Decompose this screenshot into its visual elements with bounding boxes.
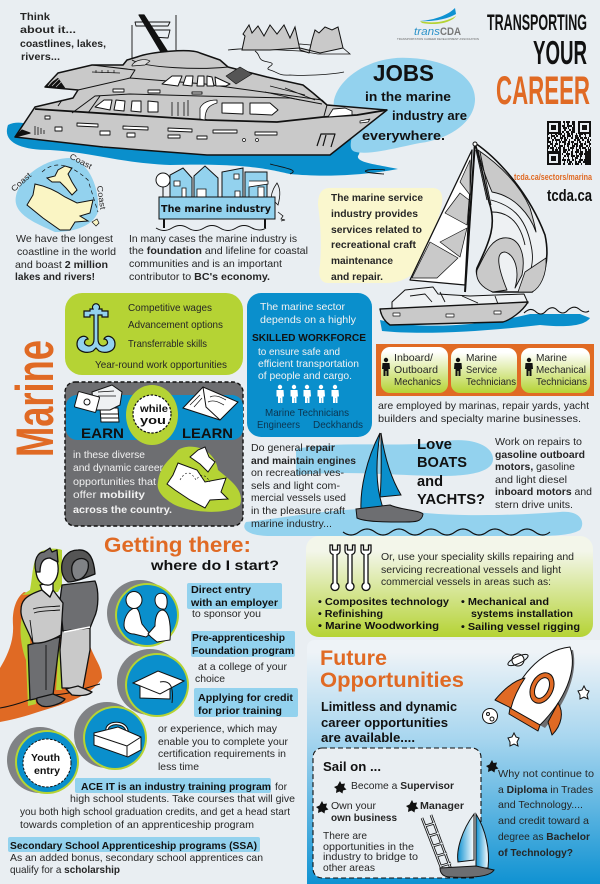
panel: speciality skills: servicing recreational vessels and light: [381, 565, 561, 576]
blue band: [66, 395, 243, 440]
woman: [60, 626, 90, 688]
text: marine industry foundation: contributor to BC's economy.: [129, 272, 270, 283]
panel: speciality skills: Or, use your speciality skills repairing and: [381, 552, 574, 563]
text: repairs to motors: gasoline outboard: [495, 450, 585, 461]
text: do general repair: in the pleasure craft: [251, 506, 345, 517]
text: continue to diploma: and credit toward a: [498, 816, 589, 827]
panel: orange technician roles: Mechanical: [536, 365, 586, 376]
icon: graduation cap circle: [117, 649, 189, 717]
text: love boats and yachts: and: [417, 473, 443, 490]
text: marine industry foundation: In many cases the marine industry is: [129, 234, 297, 245]
illustration: map of Canada with coasts: Coast: [9, 170, 34, 193]
text: repairs to motors: and light diesel: [495, 475, 567, 486]
illustration: sailboat with spinnaker: [380, 142, 590, 333]
icon: planets and stars: [482, 652, 589, 746]
icon: toolbox circle: [74, 702, 147, 770]
text: repairs to motors: motors, gasoline: [495, 462, 575, 473]
text: think about it: coastlines, lakes,: [20, 39, 106, 50]
text block: SSA: As an added bonus, secondary school apprentices can: [10, 853, 263, 864]
highlight and text: direct entry: to sponsor you: [192, 609, 261, 620]
text block: ACE IT: you both high school graduation credits, and get a head start: [20, 807, 290, 818]
icon: small sailboat: [440, 814, 494, 877]
text: repairs to motors: inboard motors and: [495, 487, 592, 498]
icon: five workers: [276, 385, 339, 403]
text: do general repair: Do general repair: [251, 443, 335, 454]
callout: marine service industry: and repair.: [331, 272, 383, 283]
text: repairs to motors: [495, 437, 592, 511]
panel: orange technician roles: Inboard/: [394, 353, 433, 364]
panel: skilled workforce: Deckhands: [313, 420, 363, 431]
panel: skilled workforce: Engineers: [257, 420, 300, 431]
highlight and text: direct entry: [187, 583, 282, 620]
text: repairs to motors: Work on repairs to: [495, 437, 582, 448]
illustration: map of Canada with coasts: [9, 152, 107, 232]
callout: marine service industry: services related to: [331, 225, 422, 236]
title: Marine vertical: Marine: [6, 340, 65, 457]
panel: skilled workforce: Marine Technicians: [265, 408, 349, 419]
highlight and text: applying for credit: [158, 688, 298, 773]
panel: earn while you learn: offer mobility: [73, 490, 145, 501]
text block: ACE IT: high school students. Take courses that will give: [70, 794, 295, 805]
text block: SSA: Secondary School Apprenticeship programs (SSA): [10, 841, 257, 852]
panel: speciality skills: • Mechanical and: [461, 597, 549, 608]
panel: speciality skills: [306, 529, 593, 637]
decorative water ripple: [270, 164, 385, 174]
callout: marine service industry: [318, 188, 442, 283]
text: repairs to motors: stern drive units.: [495, 500, 573, 511]
text: continue to diploma: [498, 769, 594, 859]
panel: skilled workforce: [247, 293, 372, 437]
panel: skilled workforce: The marine sector: [260, 302, 346, 313]
icon: while you badge: you: [140, 415, 166, 427]
man: [28, 637, 60, 700]
panel: earn while you learn: opportunities that: [73, 477, 156, 488]
illustration: marine industry town: [156, 166, 285, 230]
panel: speciality skills: commercial vessels in areas such as:: [381, 577, 551, 588]
text: employers: [378, 401, 589, 425]
icon: while you badge: while: [139, 404, 168, 415]
panel: benefits: Year-round work opportunities: [95, 360, 227, 371]
text: do general repair: mercial vessels used: [251, 493, 346, 504]
panel: sail on: own business: [331, 813, 397, 824]
text: continue to diploma: and Technology....: [498, 800, 583, 811]
highlight and text: direct entry: Direct entry: [191, 585, 251, 596]
panel: sail on: Become a Supervisor: [351, 781, 454, 792]
panel: benefits: Competitive wages: [128, 303, 212, 314]
illustration: two people: [0, 548, 102, 722]
panel: orange technician roles: Mechanics: [394, 377, 441, 388]
highlight and text: applying for credit: for prior training: [198, 706, 282, 717]
callout: marine service industry: recreational craft: [331, 240, 417, 251]
highlight and text: applying for credit: enable you to complete your: [158, 737, 289, 748]
text: marine industry foundation: the foundation and lifeline for coastal: [129, 246, 308, 257]
panel: orange technician roles: Marine: [536, 353, 567, 364]
title: getting there: [104, 534, 279, 573]
text: love boats and yachts: BOATS: [417, 454, 467, 471]
panel: future opportunities: Future: [320, 647, 387, 670]
icon: youth entry badge: [7, 727, 79, 794]
text: love boats and yachts: [417, 436, 485, 508]
title: transporting your career: [487, 10, 590, 113]
text: longest coastline: and boast 2 million: [15, 260, 108, 271]
panel: sail on: There are: [323, 831, 367, 842]
panel: sail on: industry to bridge to: [323, 852, 418, 863]
text: do general repair: on recreational ves-: [251, 468, 344, 479]
text: continue to diploma: a Diploma in Trades: [498, 785, 593, 796]
callout: marine service industry: industry provides: [331, 209, 418, 220]
panel: skilled workforce: efficient transportation: [258, 359, 359, 370]
icon: QR code: [547, 122, 591, 164]
panel: sail on: [313, 748, 494, 878]
panel: benefits: Transferrable skills: [128, 339, 207, 350]
panel: earn while you learn: and dynamic career: [73, 463, 164, 474]
text: do general repair: [251, 443, 356, 530]
panel: benefits: [65, 293, 243, 375]
panel: orange technician roles: Service: [466, 365, 497, 376]
text: continue to diploma: of Technology?: [498, 848, 573, 859]
panel: sail on: opportunities in the: [323, 842, 414, 853]
panel: orange technician roles: [376, 344, 594, 396]
text: do general repair: sels and light com-: [251, 481, 340, 492]
text: longest coastline: We have the longest: [16, 234, 113, 245]
icon: youth entry badge: entry: [34, 766, 60, 777]
text block: SSA: qualify for a scholarship: [10, 865, 120, 876]
text block: ACE IT: [20, 778, 295, 831]
panel: earn while you learn: [65, 382, 243, 526]
panel: skilled workforce: of people and cargo.: [258, 371, 352, 382]
icon: star: [486, 760, 498, 772]
panel: orange technician roles: Technicians: [466, 377, 516, 388]
text block: SSA: [8, 837, 263, 876]
panel: sail on: Own your: [331, 801, 377, 812]
icon: youth entry badge: Youth: [31, 753, 60, 764]
logo: transCDA: [397, 8, 479, 41]
text: marine industry foundation: communities and is an important: [129, 259, 282, 270]
callout bubble: jobs: in the marine: [365, 89, 451, 104]
illustration: map of Canada with coasts: Coast: [95, 185, 107, 211]
panel: sail on: other areas: [323, 863, 375, 874]
text: think about it: about it...: [20, 25, 76, 36]
panel: earn while you learn: LEARN: [182, 425, 233, 441]
text: think about it: rivers...: [21, 52, 60, 63]
panel: sail on: Manager: [420, 801, 464, 812]
panel: future opportunities: career opportunities: [321, 715, 448, 730]
panel: benefits: Advancement options: [128, 320, 223, 331]
text: do general repair: marine industry...: [251, 519, 332, 530]
panel: speciality skills: • Refinishing: [318, 609, 383, 620]
icon: rocket: [495, 647, 574, 735]
text: employers: builders and specialty marine businesses.: [378, 414, 581, 425]
illustration: yacht: [15, 15, 387, 155]
highlight and text: applying for credit: certification requirements in: [158, 749, 286, 760]
illustration: marine industry town: The marine industry: [161, 204, 271, 215]
text: marine industry foundation: [129, 234, 308, 283]
title: getting there: Getting there:: [104, 534, 251, 557]
logo: transCDA: CDA: [440, 26, 461, 38]
panel: sail on: Sail on ...: [323, 759, 381, 774]
icon: technician figures: [382, 358, 533, 376]
text block: ACE IT: ACE IT is an industry training program: [81, 782, 271, 793]
panel: earn while you learn: in these diverse: [73, 450, 145, 461]
text: continue to diploma: degree as Bachelor: [498, 832, 590, 843]
icon: ladder: [422, 815, 452, 875]
panel: earn while you learn: EARN: [81, 425, 124, 441]
text block: ACE IT: towards completion of an apprenticeship program: [20, 820, 254, 831]
icon: map on lime blob: [158, 447, 241, 512]
highlight and text: pre-apprenticeship: Pre-apprenticeship: [192, 633, 285, 644]
highlight and text: pre-apprenticeship: at a college of your: [198, 662, 288, 673]
text: employers: are employed by marinas, repair yards, yacht: [378, 401, 589, 412]
icon: open book: [183, 387, 238, 420]
panel: speciality skills: • Marine Woodworking: [318, 621, 439, 632]
callout: marine service industry: maintenance: [331, 256, 393, 267]
logo: transCDA: TRANSPORTATION CAREER DEVELOPMENT ASSOCIATION: [397, 38, 479, 41]
text: longest coastline: lakes and rivers!: [15, 272, 95, 283]
highlight and text: applying for credit: less time: [158, 762, 199, 773]
callout: marine service industry: The marine service: [331, 193, 423, 204]
text: longest coastline: coastline in the world: [17, 247, 116, 258]
illustration: water under yacht: [7, 123, 398, 176]
highlight and text: pre-apprenticeship: Foundation program: [192, 646, 294, 657]
panel: orange technician roles: Outboard: [394, 365, 438, 376]
panel: speciality skills: • Sailing vessel rigging: [461, 622, 580, 633]
highlight and text: applying for credit: Applying for credit: [198, 693, 294, 704]
panel: future opportunities: [307, 640, 600, 884]
panel: orange technician roles: Technicians: [536, 377, 587, 388]
icon: anchor: [77, 304, 115, 352]
panel: future opportunities: are available....: [321, 730, 415, 745]
panel: speciality skills: systems installation: [471, 609, 573, 620]
text: think about it: Think: [20, 12, 50, 23]
title: getting there: where do I start?: [150, 557, 279, 573]
text: think about it: [20, 12, 106, 63]
icon: handshake circle: [107, 580, 179, 647]
callout bubble: jobs: industry are: [392, 108, 467, 123]
highlight and text: applying for credit: or experience, which may: [158, 724, 278, 735]
text: website links: [514, 172, 593, 205]
text: love boats and yachts: Love: [417, 436, 452, 453]
callout bubble: jobs: [334, 58, 475, 153]
panel: future opportunities: Opportunities: [320, 669, 464, 692]
highlight and text: pre-apprenticeship: [191, 631, 295, 685]
icon: wrenches: [330, 545, 371, 590]
text: continue to diploma: Why not continue to: [498, 769, 594, 780]
icon: while you badge: [126, 385, 178, 445]
highlight and text: pre-apprenticeship: choice: [195, 674, 225, 685]
panel: earn while you learn: across the country.: [73, 505, 172, 516]
highlight and text: direct entry: with an employer: [190, 598, 278, 609]
text block: ACE IT: for: [275, 782, 288, 793]
callout bubble: jobs: JOBS: [373, 60, 434, 86]
panel: skilled workforce: to ensure safe and: [258, 347, 340, 358]
panel: skilled workforce: SKILLED WORKFORCE: [252, 333, 366, 344]
panel: future opportunities: Limitless and dynamic: [321, 699, 457, 714]
illustration: distant trees and shoreline: [228, 25, 350, 75]
text: love boats and yachts: YACHTS?: [417, 491, 485, 508]
callout bubble: jobs: everywhere.: [362, 128, 445, 143]
illustration: light blue swooshes: [244, 440, 582, 536]
text: longest coastline: [15, 234, 116, 283]
illustration: map of Canada with coasts: Coast: [68, 152, 94, 171]
panel: speciality skills: • Composites technology: [318, 597, 449, 608]
icon: blue sailboat: [356, 433, 423, 522]
panel: skilled workforce: depends on a highly: [260, 315, 357, 326]
text: do general repair: and maintain engines: [251, 456, 356, 467]
icon: hand with money: [74, 385, 122, 422]
panel: orange technician roles: Marine: [466, 353, 497, 364]
logo: transCDA: trans: [414, 26, 441, 38]
